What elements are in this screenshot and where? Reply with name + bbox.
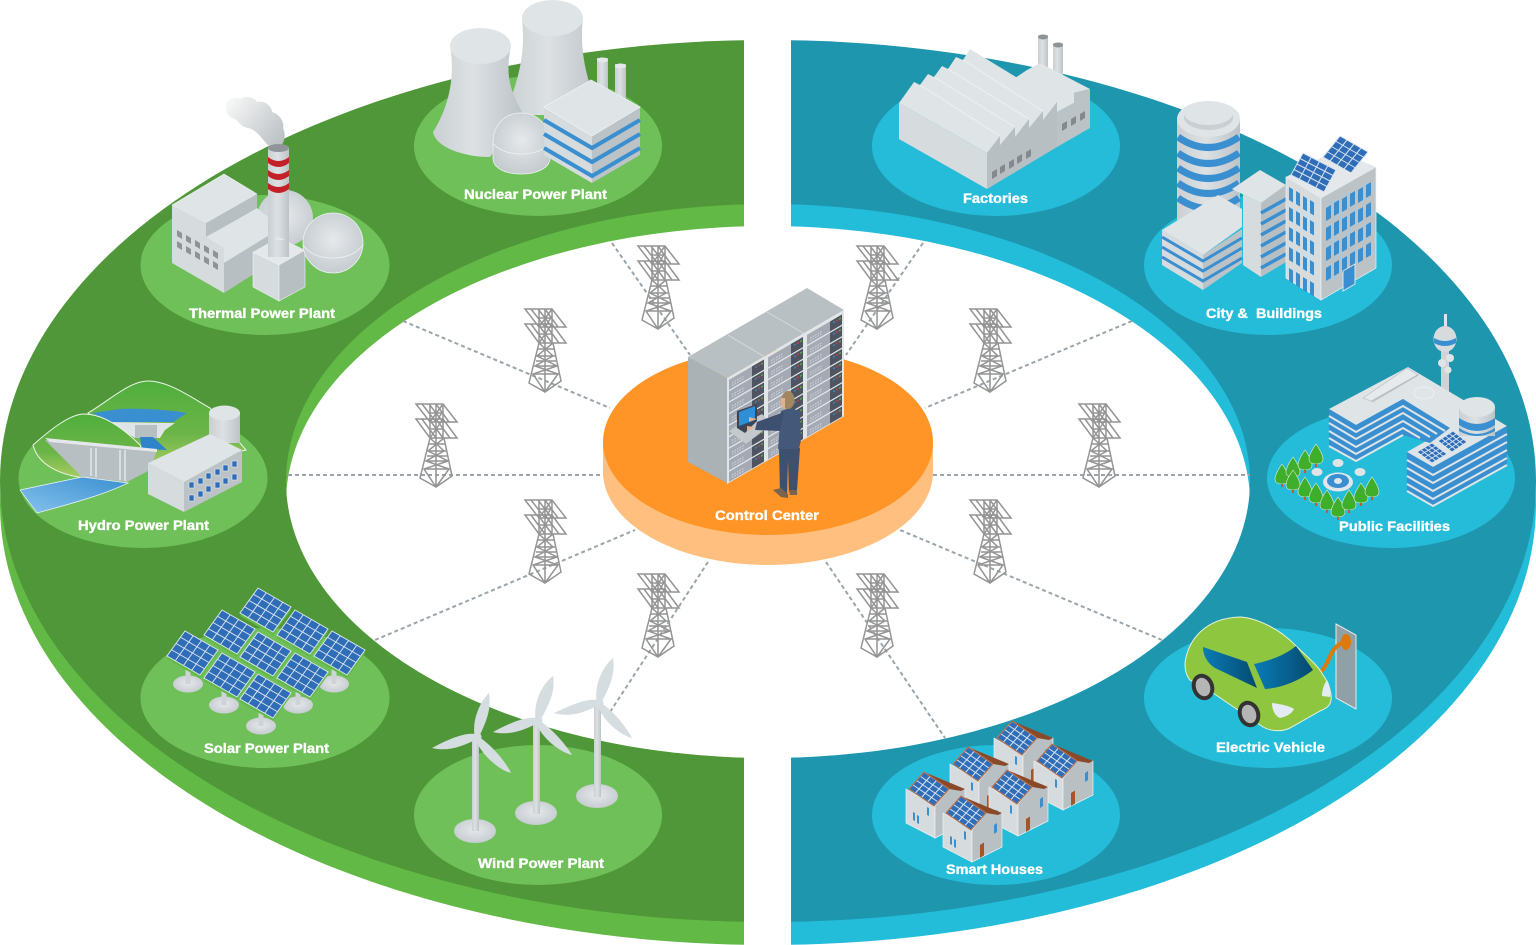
control center platform [603,288,933,565]
panel: electric vehicle [1144,617,1392,768]
icon: public buildings with tower and park [1275,314,1507,520]
icon: city buildings [1162,101,1376,300]
label: nuclear: Nuclear Power Plant [464,186,607,202]
icon: solar array [167,588,365,734]
panel: hydro power plant [18,381,268,548]
panel: city and buildings [1144,101,1392,335]
label: smart houses: Smart Houses [946,861,1043,877]
icon: hydro dam and plant [20,381,246,513]
icon: operator at laptop [729,391,801,498]
icon: wind turbines [432,658,632,843]
label: wind: Wind Power Plant [478,855,604,871]
panel: factories [872,34,1120,216]
label: electric vehicle: Electric Vehicle [1216,739,1325,755]
label: solar: Solar Power Plant [204,740,329,756]
icon: cooling towers and reactor [433,0,640,183]
icon: smart houses with solar roofs [906,721,1093,862]
icon: thermal plant with chimney [172,97,363,301]
label: thermal: Thermal Power Plant [189,305,335,321]
icon: server racks [688,288,844,484]
panel: thermal power plant [140,97,390,335]
label: city: City & Buildings [1206,305,1322,321]
panel: nuclear power plant [414,0,662,216]
label: public facilities: Public Facilities [1339,518,1450,534]
panel: solar power plant [140,588,390,768]
panel: wind power plant [414,658,662,885]
panel: public facilities [1267,314,1515,548]
icon: charging post [1320,624,1356,709]
label: factories: Factories [963,190,1028,206]
icon: electric car [1185,617,1331,731]
panel: energy generation half ring [0,40,744,945]
label: control center: Control Center [715,507,820,523]
panel: energy consumption half ring [791,40,1536,945]
transmission dashed lines [288,243,1250,738]
label: hydro: Hydro Power Plant [78,517,209,533]
icon: factory [899,34,1090,189]
panel: smart houses [872,721,1120,885]
transmission towers [416,246,1120,657]
